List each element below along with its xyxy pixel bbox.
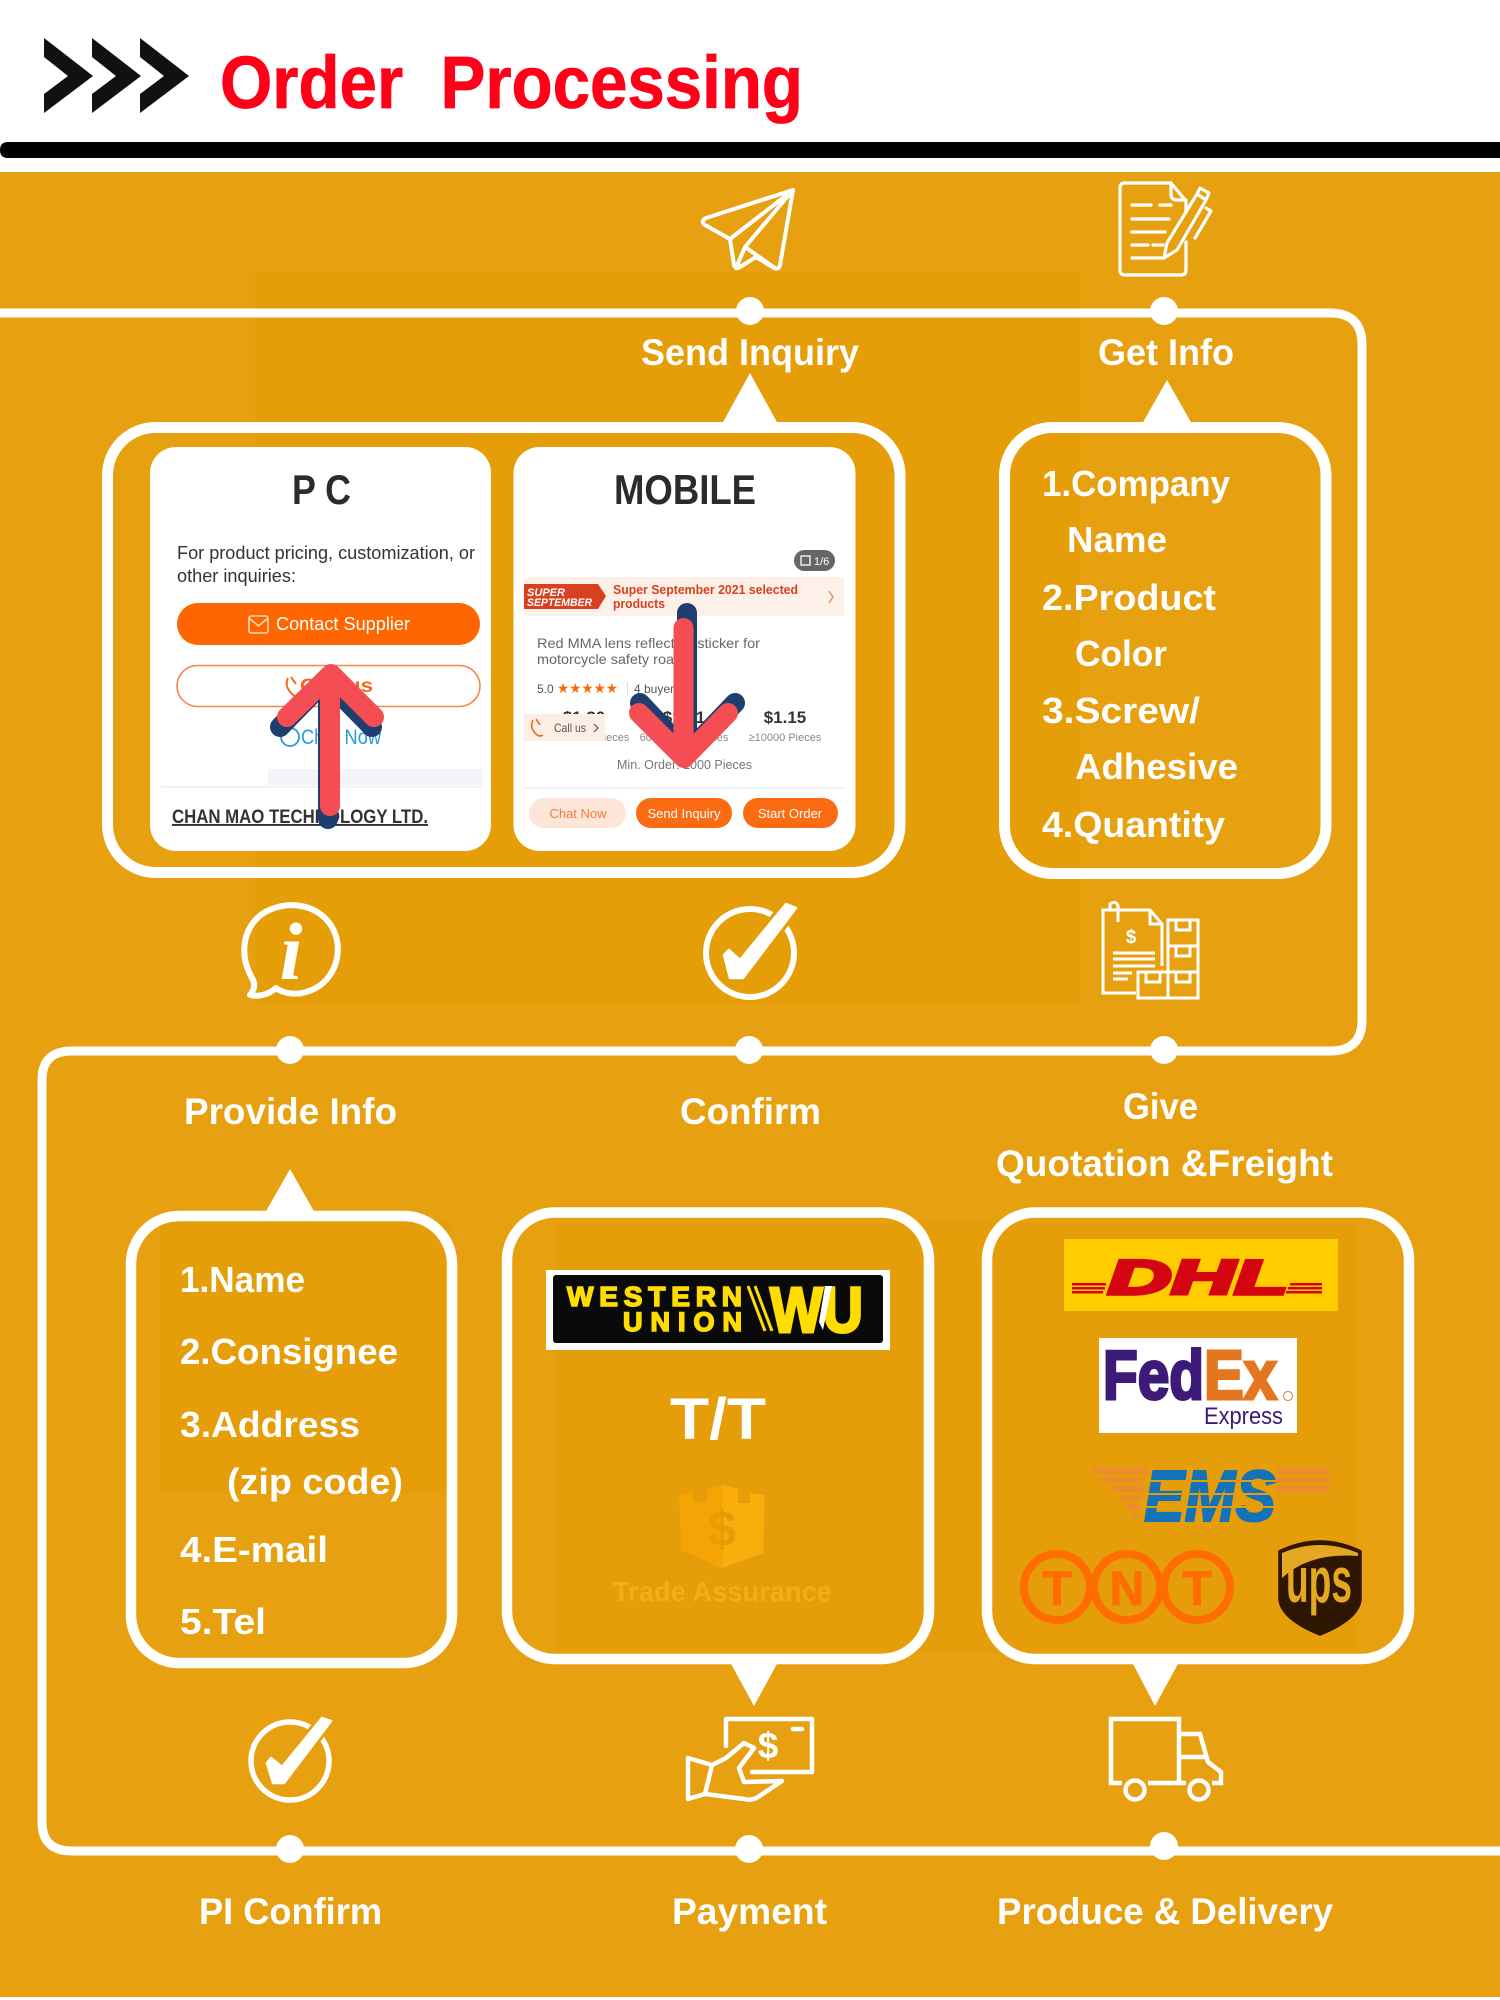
PC inquiry text: For product pricing, customization, or	[177, 543, 475, 563]
panel: provide info list	[131, 1169, 452, 1663]
label: Confirm: Confirm	[680, 1091, 821, 1132]
panel frame	[1004, 428, 1326, 874]
PC inquiry text: other inquiries:	[177, 566, 296, 586]
promo banner: SUPER	[527, 587, 565, 599]
label: Send Inquiry: Send Inquiry	[641, 332, 859, 373]
DHL logo: DHL	[1108, 1252, 1288, 1305]
panel frame	[131, 1216, 452, 1663]
price tiers: 6000-9999 Pieces	[640, 732, 729, 744]
panel frame	[108, 428, 900, 872]
icon: info bubble	[244, 905, 338, 997]
rating row: ★★★★★	[557, 681, 618, 697]
floating call us tag: Call us	[554, 721, 586, 735]
list text: 5.Tel	[180, 1601, 266, 1642]
title: Order Processing	[220, 41, 803, 124]
list text: 2.Product	[1042, 577, 1216, 618]
panel: freight carriers	[987, 1212, 1409, 1706]
icon: hand with payment card: $	[758, 1725, 779, 1766]
pointer triangle	[1142, 380, 1192, 424]
icon: PI confirm check	[251, 1718, 331, 1800]
PC heading: P C	[292, 466, 351, 513]
rating row: 5.0	[537, 682, 554, 696]
pointer triangle	[722, 373, 778, 424]
mobile action buttons: Start Order	[758, 806, 823, 821]
minimum order: Min. Order: 1000 Pieces	[617, 757, 752, 772]
header chevrons icon	[44, 38, 189, 113]
T/T text: T/T	[670, 1387, 766, 1452]
image counter badge	[794, 550, 835, 571]
product title: Red MMA lens reflective sticker for	[537, 635, 760, 651]
arrow up	[280, 674, 374, 819]
icon: hand with payment card	[688, 1719, 812, 1800]
promo banner: products	[613, 596, 665, 611]
floating call us tag	[524, 714, 605, 741]
call us button	[177, 666, 480, 706]
Trade Assurance shield	[679, 1485, 765, 1568]
pointer triangle	[265, 1169, 315, 1213]
list text	[180, 1259, 403, 1642]
TNT logo: T	[1182, 1563, 1212, 1616]
label: Get Info: Get Info	[1098, 332, 1234, 373]
Western Union logo: UNION	[623, 1307, 742, 1337]
FedEx logo	[1099, 1336, 1297, 1433]
EMS logo: EMS	[1144, 1457, 1276, 1537]
price tiers	[541, 708, 822, 744]
list text: Name	[1067, 519, 1167, 560]
icon: quotation and boxes	[1103, 902, 1198, 998]
icon: document and pen	[1120, 183, 1211, 275]
promo banner: Super September 2021 selected	[613, 582, 798, 597]
icon: confirm check	[706, 904, 796, 997]
arrow down	[639, 613, 735, 758]
icon: delivery truck	[1111, 1719, 1221, 1800]
price tiers: ≥10000 Pieces	[749, 732, 822, 744]
label: Give Quotation & Freight: Quotation &Freight	[996, 1143, 1333, 1184]
DHL logo	[1064, 1239, 1338, 1311]
price tiers: 1000-5999 Pieces	[541, 732, 630, 744]
list text: Adhesive	[1075, 746, 1238, 787]
list text: 4.E-mail	[180, 1529, 328, 1570]
list text: 3.Screw/	[1042, 690, 1200, 731]
call us button: Call us	[300, 676, 373, 697]
promo banner	[524, 577, 844, 616]
mobile action buttons: Chat Now	[549, 806, 607, 821]
mobile action buttons: Send Inquiry	[648, 806, 721, 821]
Western Union logo	[546, 1270, 890, 1350]
contact supplier button: Contact Supplier	[276, 613, 410, 634]
icon: quotation and boxes: $	[1126, 927, 1137, 948]
promo banner: SEPTEMBER	[527, 597, 592, 609]
Western Union logo: WESTERN	[567, 1281, 742, 1312]
price tiers: $1.15	[764, 708, 806, 727]
Trade Assurance shield: $	[708, 1501, 736, 1557]
contact supplier button	[177, 603, 480, 645]
header black rule	[0, 142, 1500, 158]
PC inquiry text	[177, 543, 475, 586]
mobile heading: MOBILE	[614, 466, 756, 513]
label: Payment: Payment	[672, 1891, 827, 1932]
Trade Assurance text: Trade Assurance	[613, 1576, 832, 1607]
mobile action buttons	[529, 798, 838, 828]
list text: 1.Name	[180, 1259, 305, 1300]
panel: payment methods	[507, 1212, 929, 1706]
FedEx logo: Ex	[1204, 1336, 1277, 1414]
FedEx logo: Express	[1204, 1403, 1283, 1430]
list text: Color	[1075, 633, 1167, 674]
rating row	[537, 681, 680, 697]
FedEx logo: Fed	[1103, 1336, 1204, 1414]
company name: CHAN MAO TECHNOLOGY LTD.	[172, 807, 428, 828]
label: Provide Info: Provide Info	[184, 1091, 397, 1132]
pointer triangle	[730, 1662, 778, 1706]
label: Give Quotation & Freight: Give	[1123, 1086, 1198, 1127]
UPS logo: ups	[1286, 1544, 1352, 1616]
price tiers: $1.30	[563, 708, 605, 727]
list text: 2.Consignee	[180, 1331, 398, 1372]
Western Union logo: WU	[770, 1274, 863, 1346]
EMS logo	[1093, 1457, 1330, 1537]
price tiers: $1.21	[663, 708, 705, 727]
TNT logo	[1024, 1554, 1230, 1620]
image counter badge: 1/6	[814, 556, 829, 568]
panel: inquiry channels	[108, 373, 900, 872]
pointer triangle	[1132, 1662, 1179, 1706]
panel frame	[507, 1212, 929, 1659]
list text: 1.Company	[1042, 463, 1230, 504]
rating row: 4 buyers	[634, 682, 680, 696]
list text: 4.Quantity	[1042, 804, 1225, 845]
label: Produce & Delivery: Produce & Delivery	[997, 1891, 1333, 1932]
list text	[1042, 463, 1238, 845]
panel: get info list	[1004, 380, 1326, 874]
icon: info bubble: i	[280, 906, 303, 997]
label: Give Quotation & Freight	[996, 1086, 1333, 1184]
icon: paper plane	[703, 190, 793, 269]
chat now link: Chat Now	[301, 726, 382, 749]
panel frame	[987, 1212, 1409, 1659]
TNT logo: T	[1042, 1563, 1072, 1616]
card: PC	[150, 447, 491, 851]
flow nodes	[276, 297, 1178, 1863]
label: PI Confirm: PI Confirm	[199, 1891, 382, 1932]
card: mobile	[514, 447, 856, 851]
process flow line	[0, 313, 1500, 1851]
list text: 3.Address	[180, 1404, 360, 1445]
list text: (zip code)	[227, 1461, 403, 1502]
product title	[537, 635, 760, 667]
product title: motorcycle safety road	[537, 651, 682, 667]
TNT logo: N	[1110, 1563, 1144, 1616]
UPS logo	[1279, 1541, 1361, 1635]
